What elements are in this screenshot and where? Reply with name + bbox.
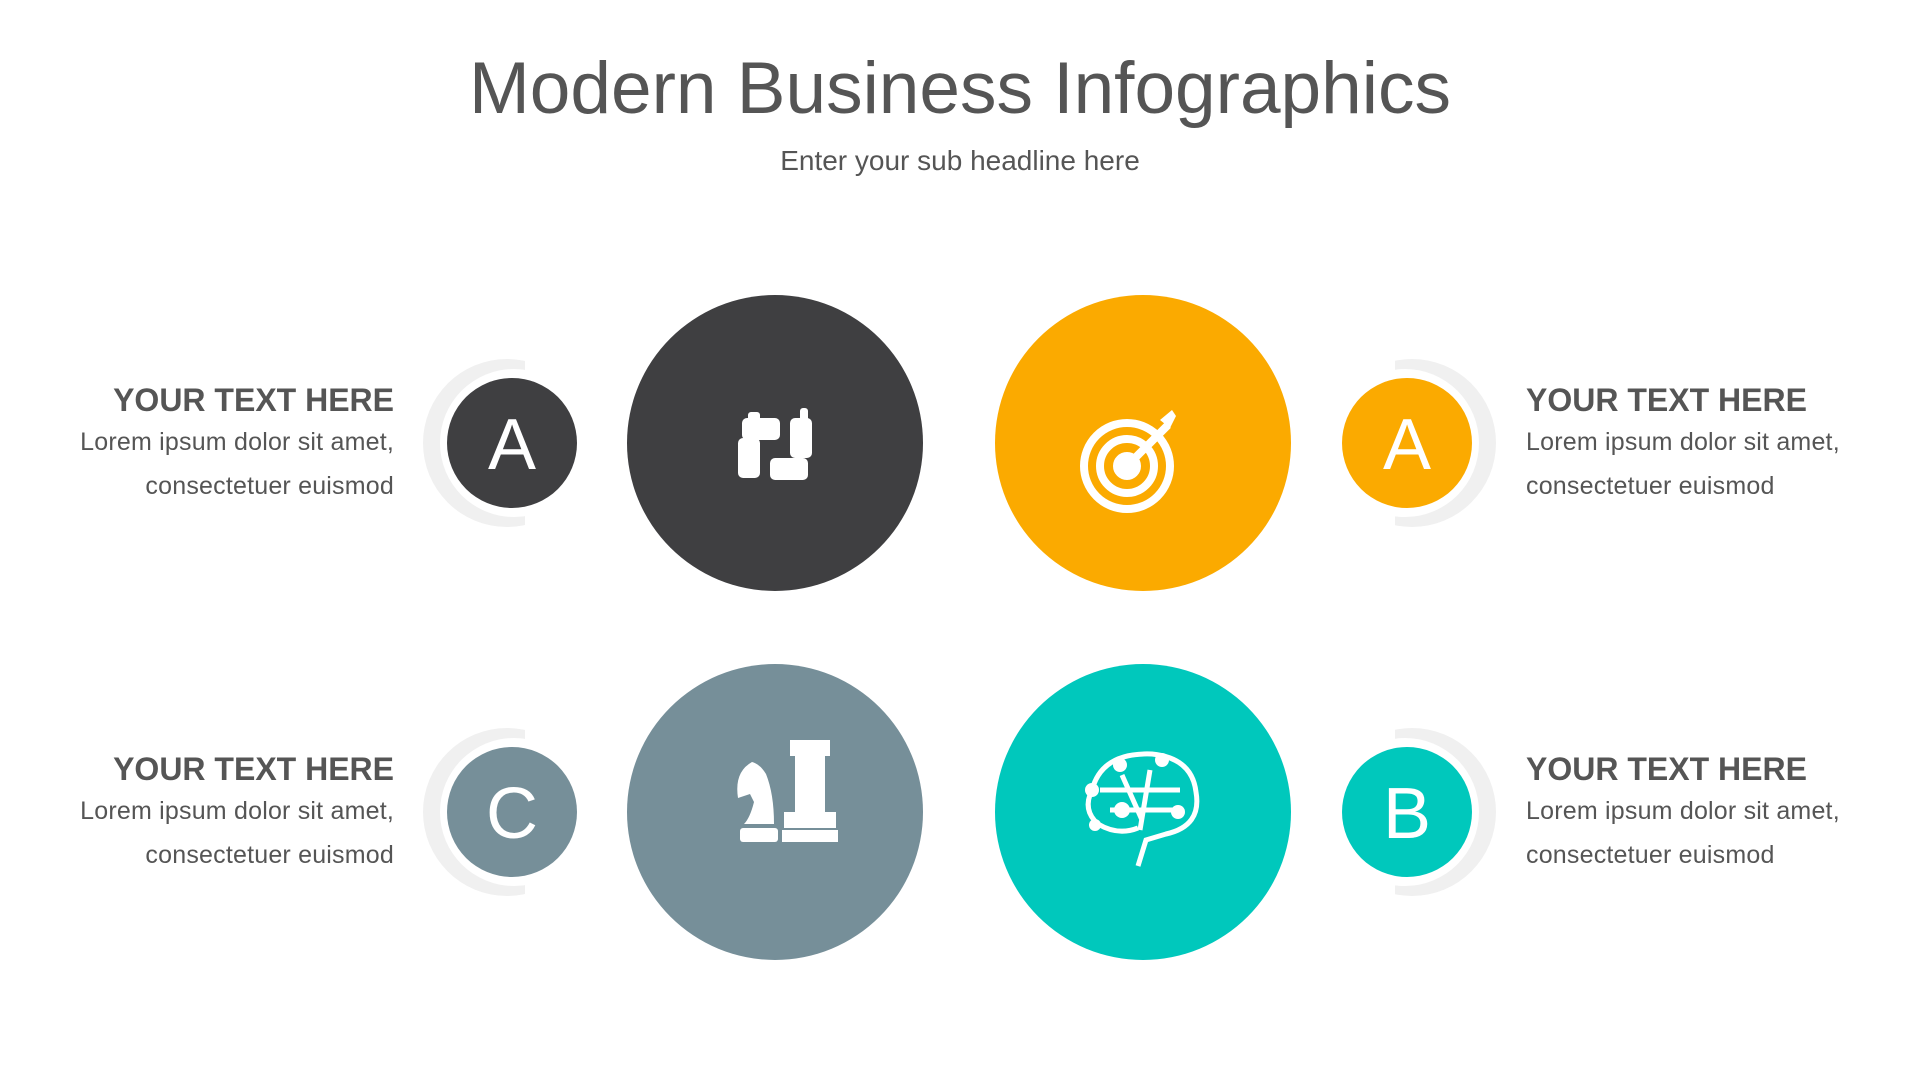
text block: top left	[80, 382, 394, 500]
icon: brain	[1088, 754, 1197, 866]
text block: top right: Lorem ipsum dolor sit amet,	[1526, 428, 1840, 456]
badge: A dark: A	[488, 405, 536, 485]
text block: bottom right: Lorem ipsum dolor sit amet,	[1526, 797, 1840, 825]
badge: A orange	[1328, 359, 1496, 527]
graphics	[423, 295, 1496, 960]
text block: bottom right: consectetuer euismod	[1526, 841, 1775, 869]
badge: C gray: C	[486, 774, 538, 854]
badge: B teal: B	[1383, 774, 1431, 854]
badge: B teal	[1328, 728, 1496, 896]
badge: C gray	[423, 728, 591, 896]
text block: top left: YOUR TEXT HERE	[113, 382, 394, 418]
text block: bottom left: consectetuer euismod	[145, 841, 394, 869]
circle: teal brain	[995, 664, 1291, 960]
icon: target	[1084, 423, 1170, 509]
text block: bottom right	[1526, 751, 1840, 869]
badge: A orange: A	[1383, 405, 1431, 485]
text block: bottom left: YOUR TEXT HERE	[113, 751, 394, 787]
circle: dark teamwork	[627, 295, 923, 591]
text block: top left: Lorem ipsum dolor sit amet,	[80, 428, 394, 456]
text block: top right: YOUR TEXT HERE	[1526, 382, 1807, 418]
text block: bottom left: Lorem ipsum dolor sit amet,	[80, 797, 394, 825]
circle: orange target	[995, 295, 1291, 591]
text block: bottom left	[80, 751, 394, 869]
title: Modern Business Infographics	[469, 48, 1451, 129]
circle: gray chess	[627, 664, 923, 960]
text block: top left: consectetuer euismod	[145, 472, 394, 500]
icon: chess	[737, 740, 838, 842]
text block: top right: consectetuer euismod	[1526, 472, 1775, 500]
text block: bottom right: YOUR TEXT HERE	[1526, 751, 1807, 787]
text block: top right	[1526, 382, 1840, 500]
icon: hands	[738, 408, 812, 480]
badge: A dark	[423, 359, 591, 527]
subtitle: Enter your sub headline here	[780, 145, 1140, 176]
